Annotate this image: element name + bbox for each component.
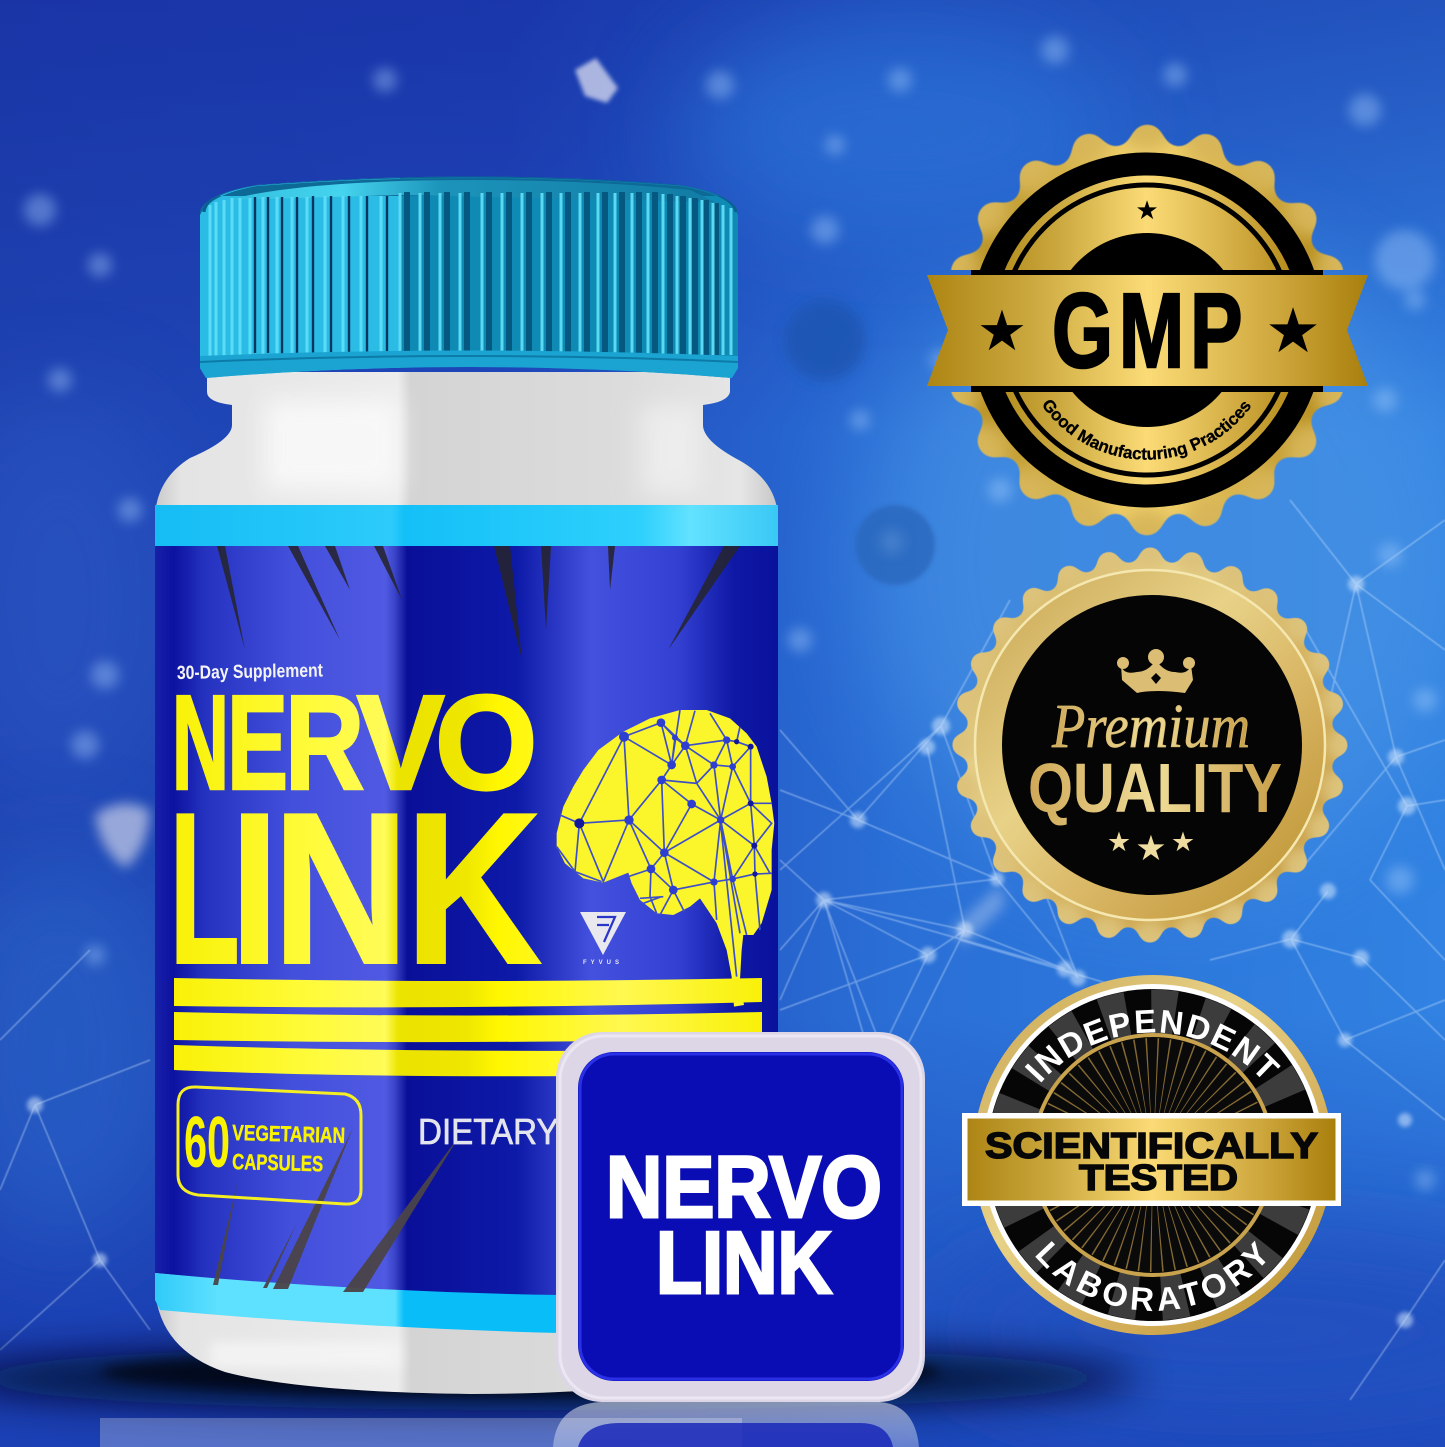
supplement caption: 30-Day Supplement [177,660,324,684]
capsule count box: CAPSULES [232,1149,323,1176]
cap top rim [200,178,738,215]
bottom cyan label band [155,1273,778,1333]
yellow label stripes [174,978,762,1076]
capsule count box: VEGETARIAN [232,1120,345,1148]
three stars: ★ [1171,827,1195,858]
brand name: NERVO: E [227,667,288,818]
top cyan label band [155,505,778,550]
brand name: LINK: L [169,767,240,1009]
curved text: laboratory: LABORATORY [1035,1240,1266,1312]
FYVUS logo [580,912,626,966]
label dark streaks [217,546,740,660]
badge: premium quality [963,558,1337,932]
brand name: NERVO [172,667,538,818]
GMP ribbon: ★ [1265,294,1321,367]
banner [962,1113,1341,1206]
brand name: NERVO: R [285,667,365,818]
dietary supplement text: DIETARY SUPPLEMENT [418,1111,792,1152]
banner: TESTED [1079,1157,1238,1198]
brand name: NERVO: N [172,667,229,818]
badge: scientifically tested [962,975,1341,1335]
GMP top star: ★ [1135,196,1159,226]
GMP ribbon: GMP [1052,272,1248,390]
front product box reflection [553,1402,919,1447]
GMP ribbon [927,270,1368,392]
three stars: ★ [1135,829,1167,869]
brand name: LINK [169,767,542,1009]
three stars [1107,827,1195,869]
brand name: NERVO: O [435,667,538,818]
bottle neck and white body [150,365,785,1400]
front product box [556,1032,925,1402]
quality word: QUALITY [1028,749,1282,827]
blue label [155,546,778,1300]
floor shadow and reflection [0,1346,1140,1447]
FYVUS logo: FYVUS [583,960,623,966]
premium script: Premium [1051,693,1250,761]
cap ribs: left section [210,196,381,360]
brand name: NERVO: V [357,667,445,818]
curved text: independent: INDEPENDENT [1024,1010,1281,1082]
brand name: LINK: K [405,767,542,1009]
box brand name: LINK [656,1213,832,1312]
box brand name: NERVO [606,1139,882,1236]
brain network icon [557,710,774,1007]
capsule count box: 60 [184,1103,230,1183]
cap ribs: right section [407,192,716,355]
brand name: LINK: N [272,767,409,1009]
cap lower ring [200,350,738,378]
product bottle [150,170,792,1400]
brand name: LINK: I [230,767,279,1009]
GMP curved caption: Good Manufacturing Practices [1044,400,1250,460]
three stars: ★ [1107,827,1131,858]
GMP ribbon: ★ [977,299,1027,364]
banner: SCIENTIFICALLY [985,1125,1318,1166]
box brand name [606,1139,882,1312]
badge: GMP [927,124,1368,536]
capsule count box [178,1087,361,1204]
bottle cap [200,170,740,385]
crown icon [1117,649,1195,693]
